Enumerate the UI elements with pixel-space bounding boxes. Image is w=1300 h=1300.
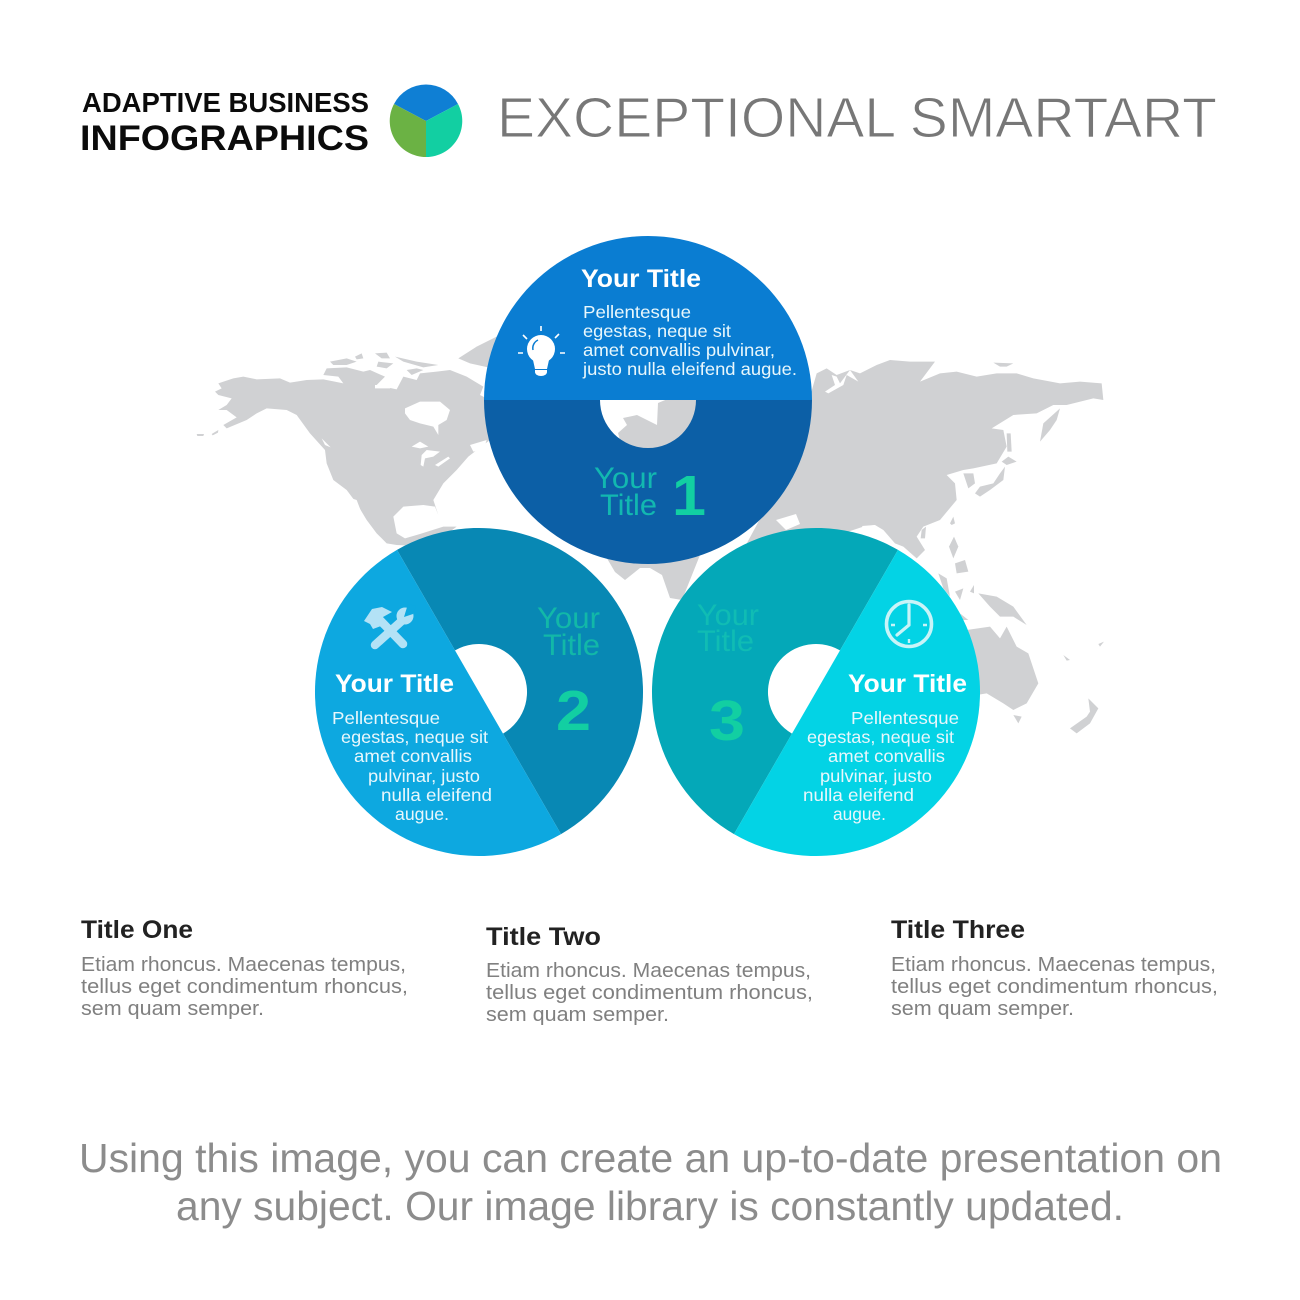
- text block: title two: [486, 923, 813, 1026]
- circle 1 upper segment: [484, 236, 812, 400]
- circle 3 label: Your: [697, 599, 759, 632]
- circle 2 text: Pellentesque: [332, 708, 440, 728]
- circle 2 label: Title: [543, 629, 600, 662]
- text block: title three: [891, 916, 1218, 1020]
- text block: title two: tellus eget condimentum rhoncus,: [486, 982, 813, 1004]
- circle 3 text: egestas, neque sit: [807, 727, 954, 747]
- text block: title two: Etiam rhoncus. Maecenas tempus,: [486, 960, 811, 982]
- circle 2 label: [537, 602, 600, 662]
- circle 1 lower segment: [484, 400, 812, 564]
- circle 2 dark segment: [397, 528, 643, 834]
- header brand text: INFOGRAPHICS: [80, 119, 369, 158]
- footer text: any subject. Our image library is constantly updated.: [176, 1183, 1124, 1229]
- text block: title two: sem quam semper.: [486, 1004, 669, 1026]
- icon: light bulb: [518, 326, 565, 376]
- circle 1 label: [594, 462, 657, 522]
- circle 2 text: nulla eleifend: [381, 785, 492, 805]
- circle 1 text: [582, 302, 797, 379]
- panel: circle 3: [652, 528, 980, 856]
- header brand text: [80, 87, 369, 158]
- circle 3 text: amet convallis: [828, 746, 945, 766]
- circle 1 text: egestas, neque sit: [583, 321, 731, 341]
- main title: EXCEPTIONAL SMARTART: [497, 86, 1217, 150]
- footer text: [79, 1135, 1222, 1229]
- footer text: Using this image, you can create an up-to-date presentation on: [79, 1135, 1222, 1181]
- circle 2 text: [332, 708, 492, 824]
- number 2: 2: [556, 679, 591, 743]
- text block: title three: Title Three: [891, 916, 1025, 944]
- circle 1 label: Title: [600, 489, 657, 522]
- circle 2 text: augue.: [395, 804, 449, 824]
- panel: circle 1: [484, 236, 812, 564]
- circle 3 text: [803, 708, 959, 824]
- circle 3 text: augue.: [833, 804, 886, 824]
- circle 2 text: pulvinar, justo: [368, 766, 480, 786]
- circle 1 text: Pellentesque: [583, 302, 691, 322]
- text block: title one: [81, 916, 408, 1020]
- circle 3 dark segment: [652, 528, 898, 834]
- circle 2 text: amet convallis: [354, 746, 472, 766]
- icon: logo pie: [390, 84, 462, 157]
- text block: title one: Etiam rhoncus. Maecenas tempus,: [81, 954, 406, 976]
- world map: [197, 337, 1104, 733]
- text block: title one: tellus eget condimentum rhoncus,: [81, 976, 408, 998]
- text block: title three: sem quam semper.: [891, 998, 1074, 1020]
- header brand text: ADAPTIVE BUSINESS: [82, 87, 369, 118]
- icon: clock: [886, 602, 932, 646]
- text block: title three: Etiam rhoncus. Maecenas tempus,: [891, 954, 1216, 976]
- circle 1 text: amet convallis pulvinar,: [583, 340, 775, 360]
- circle 3 light segment: [734, 550, 980, 856]
- circle 2 light segment: [315, 550, 561, 856]
- text block: title three: tellus eget condimentum rhoncus,: [891, 976, 1218, 998]
- circle 3 heading: Your Title: [848, 670, 967, 698]
- panel: circle 2: [315, 528, 643, 856]
- circle 3 text: nulla eleifend: [803, 785, 914, 805]
- circle 3 text: Pellentesque: [851, 708, 959, 728]
- circle 1 text: justo nulla eleifend augue.: [582, 359, 797, 379]
- icon: hammer and wrench: [364, 604, 416, 645]
- circle 3 label: [697, 599, 759, 658]
- circle 1 label: Your: [594, 462, 657, 495]
- circle 1 heading: Your Title: [581, 265, 701, 293]
- number 1: 1: [672, 464, 706, 528]
- circle 3 text: pulvinar, justo: [820, 766, 932, 786]
- number 3: 3: [709, 689, 745, 753]
- text block: title one: sem quam semper.: [81, 998, 264, 1020]
- text block: title one: Title One: [81, 916, 193, 944]
- text block: title two: Title Two: [486, 923, 601, 951]
- circle 3 label: Title: [697, 625, 754, 658]
- circle 2 text: egestas, neque sit: [341, 727, 488, 747]
- circle 2 heading: Your Title: [335, 670, 454, 698]
- circle 2 label: Your: [537, 602, 600, 635]
